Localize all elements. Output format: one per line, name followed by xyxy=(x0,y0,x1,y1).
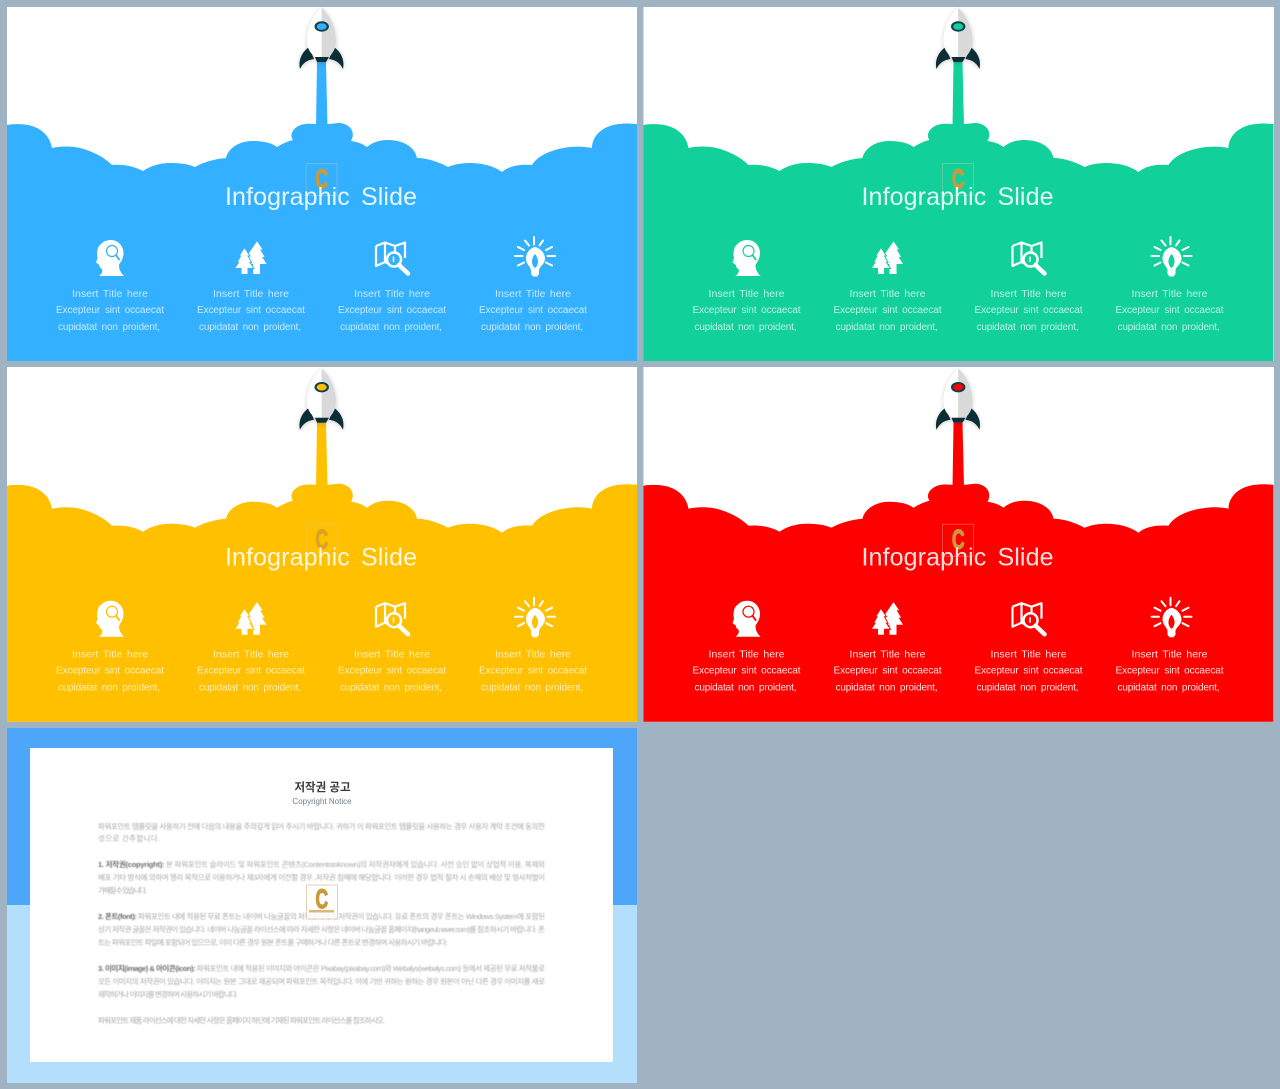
item 2: cupidatat non proident, xyxy=(836,322,938,333)
item 1: Insert Title here xyxy=(708,649,785,661)
cloud and exhaust xyxy=(644,423,1274,722)
item 1 xyxy=(56,240,164,333)
copyright clause 1: 1. 저작권(copyright): 본 파워포인트 슬라이드 및 파워포인트 콘텐츠(Contentstoknown)의 저작권자에게 있습니다. 사전 승인 없이 상업적 이용, 복제와 xyxy=(98,859,545,869)
item 4: Insert Title here xyxy=(495,288,571,300)
item 2: Excepteur sint occaecat xyxy=(834,666,942,677)
item 4: cupidatat non proident, xyxy=(481,322,583,333)
item 3: Insert Title here xyxy=(354,649,430,661)
item 1: cupidatat non proident, xyxy=(694,322,796,333)
panel: copyright notice slide xyxy=(7,728,637,1083)
item 1: Excepteur sint occaecat xyxy=(56,666,164,677)
item 2: cupidatat non proident, xyxy=(199,322,301,333)
title: Infographic Slide xyxy=(862,183,1054,211)
item 2: Excepteur sint occaecat xyxy=(197,666,305,677)
item 4: Excepteur sint occaecat xyxy=(479,666,587,677)
item 3: Excepteur sint occaecat xyxy=(338,666,446,677)
item 1: Insert Title here xyxy=(708,288,785,300)
item 4 xyxy=(1116,598,1224,694)
icon: rocket xyxy=(936,8,980,69)
item 2: cupidatat non proident, xyxy=(199,683,301,694)
panel: green slide xyxy=(644,7,1274,361)
item 3 xyxy=(974,242,1083,333)
item 1: cupidatat non proident, xyxy=(694,683,796,694)
copyright clause 3: 제작하거나 이미지를 변경하여 사용하시기 바랍니다. xyxy=(98,989,238,999)
copyright clause 1 xyxy=(98,859,545,895)
cloud and exhaust xyxy=(7,62,637,361)
copyright intro xyxy=(98,821,545,843)
item 1: cupidatat non proident, xyxy=(58,322,160,333)
icon: rocket xyxy=(299,369,344,430)
item 3: Insert Title here xyxy=(990,649,1067,661)
watermark logo xyxy=(306,884,338,919)
icon: rocket xyxy=(299,8,344,69)
item 4: Excepteur sint occaecat xyxy=(479,305,587,316)
copyright clause 1: 배포 기타 방식에 의하여 영리 목적으로 이용하거나 제3자에게 이전할 경우 ,저작권 침해에 해당합니다. 이러한 경우 법적 절차 시 손해의 배상 및 형사처벌이 xyxy=(98,872,545,882)
copyright clause 1: 가해질 수 있습니다. xyxy=(98,885,147,895)
item 2: Insert Title here xyxy=(850,649,926,661)
item 3 xyxy=(338,603,446,694)
item 2 xyxy=(834,240,942,333)
copyright subtitle: Copyright Notice xyxy=(292,797,352,806)
watermark logo: C xyxy=(952,164,964,194)
item 3: cupidatat non proident, xyxy=(340,322,442,333)
item 4: cupidatat non proident, xyxy=(481,683,583,694)
item 2: cupidatat non proident, xyxy=(836,683,938,694)
item 2: Insert Title here xyxy=(213,649,289,661)
watermark logo xyxy=(306,164,337,196)
item 3 xyxy=(338,242,446,333)
item 3: cupidatat non proident, xyxy=(976,322,1078,333)
item 2: Excepteur sint occaecat xyxy=(197,305,305,316)
icon: rocket xyxy=(936,369,980,430)
watermark logo xyxy=(942,164,974,196)
item 4: cupidatat non proident, xyxy=(1118,683,1220,694)
item 4: Insert Title here xyxy=(495,649,571,661)
item 2 xyxy=(197,601,305,694)
cloud and exhaust xyxy=(644,62,1274,361)
item 2 xyxy=(834,601,942,694)
copyright clause 3: 모든 이미지의 저작권이 있습니다. 이미지는 원본 그대로 제공되며 파워포인트 목적입니다. 이에 기반 귀하는 원하는 경우 원본이 아닌 다른 경우 이미지를 새로 xyxy=(98,976,545,986)
item 2 xyxy=(197,240,305,333)
copyright clause 2: 상기 저작권 글꼴은 저작권이 있습니다. 네이버 나눔글꼴 라이선스에 따라 자세한 사항은 네이버 나눔글꼴 홈페이지(hangeul.naver.com)를 참조하시기 바랍니다. 폰 xyxy=(98,924,545,934)
item 4 xyxy=(1116,237,1224,333)
item 1: Insert Title here xyxy=(72,649,148,661)
copyright clause 3: 3. 이미지(image) & 아이콘(icon): 파워포인트 내에 적용된 이미지와 아이콘은 Pixabay(pixabay.com)와 Webalys(webalys.com) 등에서 제공된 무료 저작물로 xyxy=(98,963,545,973)
item 1: Excepteur sint occaecat xyxy=(692,305,801,316)
item 3: Insert Title here xyxy=(354,288,430,300)
cloud and exhaust xyxy=(7,423,637,722)
item 3: Excepteur sint occaecat xyxy=(338,305,446,316)
watermark logo xyxy=(942,524,974,556)
item 3: Excepteur sint occaecat xyxy=(974,666,1083,677)
item 4 xyxy=(479,598,587,694)
item 1: Insert Title here xyxy=(72,288,148,300)
title: Infographic Slide xyxy=(225,183,417,211)
panel: red slide xyxy=(644,367,1274,722)
item 3 xyxy=(974,603,1083,694)
item 3: cupidatat non proident, xyxy=(976,683,1078,694)
title: Infographic Slide xyxy=(862,544,1054,572)
panel: yellow slide xyxy=(7,367,637,722)
item 4 xyxy=(479,237,587,333)
watermark logo: C xyxy=(316,164,328,194)
item 2: Excepteur sint occaecat xyxy=(834,305,942,316)
item 1 xyxy=(692,240,801,333)
panel: blue slide xyxy=(7,7,637,361)
item 1 xyxy=(692,601,801,694)
item 4: Excepteur sint occaecat xyxy=(1116,305,1224,316)
item 3: Excepteur sint occaecat xyxy=(974,305,1083,316)
copyright clause 2 xyxy=(98,911,545,947)
copyright intro: 파워포인트 템플릿을 사용하기 전에 다음의 내용을 주의깊게 읽어 주시기 바랍니다. 귀하가 이 파워포인트 템플릿을 사용하는 경우 사용자 계약 조건에 동의한 xyxy=(98,821,545,831)
item 2: Insert Title here xyxy=(850,288,926,300)
item 4: Insert Title here xyxy=(1132,649,1208,661)
copyright intro: 것으로 간주합니다. xyxy=(98,833,160,843)
copyright footer: 파워포인트 제품 라이선스에 대한 자세한 사항은 홈페이지 하단에 기재된 파워포인트 라이선스를 참조하시오. xyxy=(98,1015,385,1025)
watermark logo: C xyxy=(952,525,964,555)
item 2: Insert Title here xyxy=(213,288,289,300)
item 3: Insert Title here xyxy=(990,288,1067,300)
copyright clause 2: 2. 폰트(font): 파워포인트 내에 적용된 무료 폰트는 네이버 나눔글꼴의 저작권자에게 저작권이 있습니다. 유료 폰트의 경우 폰트는 Windows System에 포함된 xyxy=(98,911,545,921)
watermark logo: C xyxy=(316,525,328,555)
copyright clause 3 xyxy=(98,963,545,999)
item 1: Excepteur sint occaecat xyxy=(56,305,164,316)
item 1: cupidatat non proident, xyxy=(58,683,160,694)
item 4: Insert Title here xyxy=(1132,288,1208,300)
item 1: Excepteur sint occaecat xyxy=(692,666,801,677)
watermark logo: C xyxy=(316,884,328,914)
item 4: cupidatat non proident, xyxy=(1118,322,1220,333)
item 4: Excepteur sint occaecat xyxy=(1116,666,1224,677)
item 1 xyxy=(56,601,164,694)
item 3: cupidatat non proident, xyxy=(340,683,442,694)
title: Infographic Slide xyxy=(225,544,417,572)
watermark logo xyxy=(306,524,337,556)
copyright clause 2: 트는 파워포인트 파일에 포함되어 있으므로, 이미 다른 경우 원본 폰트를 구매하거나 다른 폰트로 변경하여 사용하시기 바랍니다. xyxy=(98,937,448,947)
copyright heading: 저작권 공고 xyxy=(294,780,351,794)
